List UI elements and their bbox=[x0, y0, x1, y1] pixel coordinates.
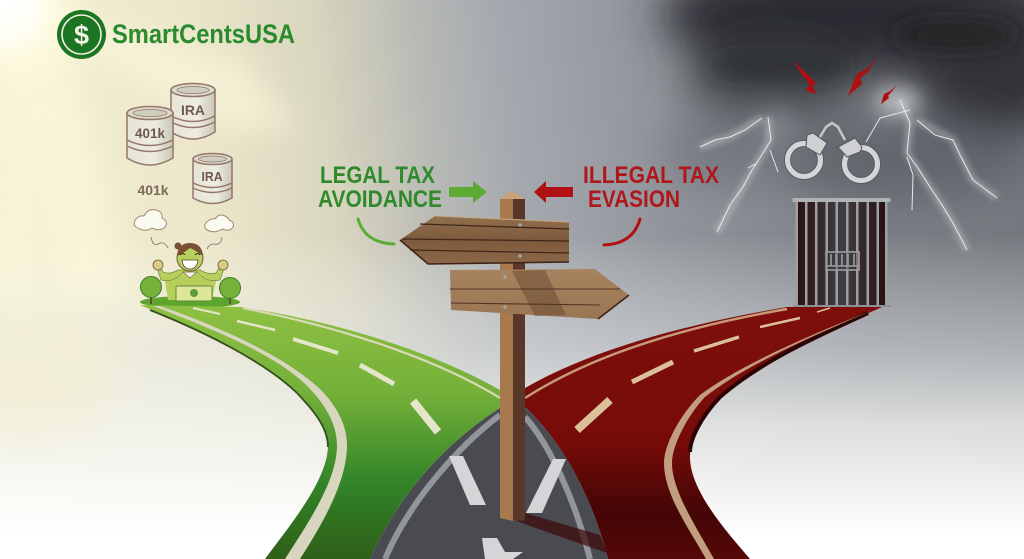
hill bbox=[140, 296, 240, 308]
heading: illegal tax evasion: ILLEGAL TAX bbox=[583, 162, 719, 189]
logo: SmartCentsUSA: $ bbox=[74, 20, 89, 50]
arrow: red to post bbox=[534, 181, 573, 203]
right edge line bbox=[243, 308, 500, 398]
post shadow bbox=[513, 513, 607, 553]
road edge line top bbox=[525, 309, 787, 398]
heading: legal tax avoidance: AVOIDANCE bbox=[318, 186, 442, 213]
can: IRA front bbox=[193, 154, 232, 204]
green road bbox=[140, 305, 500, 559]
tree left bbox=[140, 276, 162, 304]
tree right bbox=[220, 278, 240, 304]
road shadow edge bbox=[690, 313, 868, 452]
gray road bbox=[370, 407, 608, 559]
arrow: green to post bbox=[449, 181, 487, 203]
person bbox=[153, 242, 228, 301]
thought lines bbox=[151, 237, 222, 249]
heading: legal tax avoidance bbox=[318, 162, 442, 213]
curved arrow: green bbox=[358, 219, 394, 244]
can: IRA back: IRA bbox=[181, 102, 205, 118]
bottom sign pointing right bbox=[450, 269, 629, 319]
heading: illegal tax evasion: EVASION bbox=[588, 186, 680, 213]
bars bbox=[796, 202, 888, 305]
red bolt centre bbox=[848, 54, 878, 96]
signpost bbox=[400, 191, 629, 521]
can: 401k: 401k bbox=[135, 125, 165, 141]
edge lines bbox=[385, 415, 590, 559]
heading: legal tax avoidance: LEGAL TAX bbox=[320, 162, 435, 189]
curved arrow: red bbox=[604, 219, 640, 245]
road shadow edge bbox=[150, 310, 328, 447]
lane dashes bbox=[449, 456, 566, 559]
icon: jail cell bbox=[792, 198, 891, 307]
lock plate bbox=[826, 252, 859, 270]
heading: illegal tax evasion bbox=[583, 162, 719, 213]
can: IRA back bbox=[171, 84, 215, 139]
icon: right cloud bbox=[205, 215, 234, 232]
lane dashes bbox=[577, 308, 830, 430]
warm haze and sun rays bbox=[0, 300, 120, 440]
storm clouds bbox=[660, 0, 1024, 202]
lane dashes bbox=[193, 308, 438, 432]
road edge line bottom bbox=[664, 310, 873, 559]
can: 401k bbox=[127, 106, 173, 165]
logo: SmartCentsUSA: SmartCentsUSA bbox=[112, 19, 295, 49]
money bbox=[176, 286, 212, 301]
red road bbox=[525, 307, 882, 559]
icon: left cloud bbox=[134, 210, 166, 230]
icon: handcuffs bbox=[788, 123, 878, 180]
red bolt right bbox=[881, 85, 897, 104]
logo: SmartCentsUSA bbox=[57, 10, 295, 59]
red bolt left bbox=[793, 60, 816, 94]
label: 401k: 401k bbox=[138, 183, 169, 198]
post bbox=[500, 191, 525, 521]
can: IRA front: IRA bbox=[202, 169, 223, 184]
lightning bolts bbox=[700, 100, 997, 250]
top sign pointing left bbox=[400, 216, 569, 264]
left edge line bbox=[153, 306, 347, 559]
green destination: hill, trees and happy saver bbox=[140, 242, 240, 308]
